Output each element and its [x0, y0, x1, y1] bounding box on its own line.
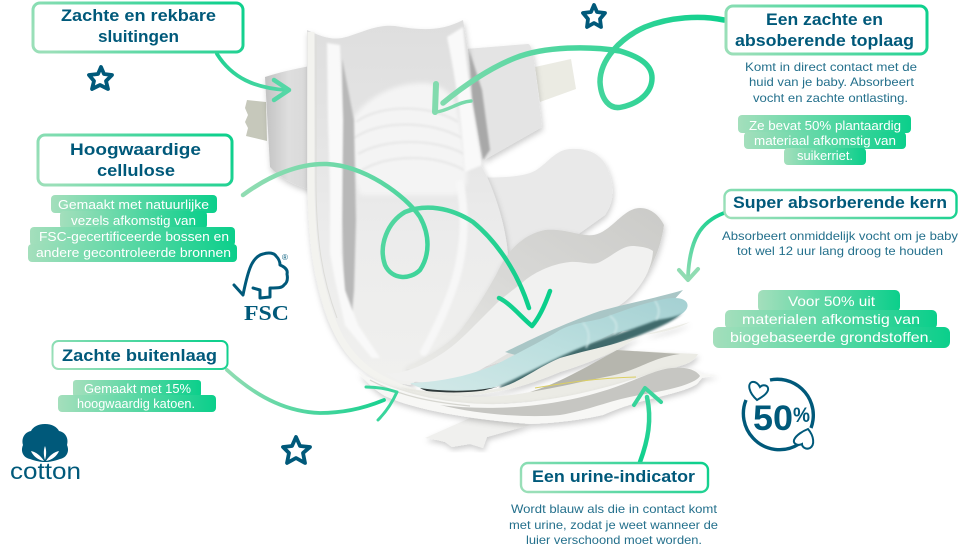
- absorbent top pad: [350, 83, 467, 195]
- arrow: toplaag: [435, 17, 724, 112]
- heading: Een urine-indicator: [532, 468, 696, 486]
- callout: urine-indicator: [509, 463, 718, 547]
- highlight pills: Ze bevat 50% plantaardig: [749, 119, 901, 133]
- heading: sluitingen: [98, 28, 179, 46]
- back thin sheet: [505, 290, 683, 362]
- right tape: [535, 59, 576, 102]
- wave pad outer: [405, 208, 664, 380]
- outer rim: [311, 32, 415, 392]
- icon: star bottom: [283, 437, 310, 463]
- icon: star top left: [89, 67, 112, 89]
- callout: zachte buitenlaag: [52, 341, 228, 412]
- description: tot wel 12 uur lang droog te houden: [737, 244, 943, 258]
- description pills: FSC-gecertificeerde bossen en: [39, 230, 229, 244]
- icon: FSC logo: FSC: [244, 301, 289, 325]
- callout: hoogwaardige cellulose: [28, 135, 237, 262]
- description pills: andere gecontroleerde bronnen: [36, 246, 231, 260]
- arrow: kern: [679, 213, 724, 280]
- heading box: [726, 6, 927, 54]
- right cuff: [447, 27, 482, 172]
- description pills: hoogwaardig katoen.: [77, 397, 195, 411]
- description pills: [58, 380, 216, 412]
- third layer grey inside: [530, 350, 680, 392]
- icon: star top center: [583, 5, 605, 27]
- description: Wordt blauw als die in contact komt: [511, 502, 718, 516]
- heading: Een zachte en: [766, 11, 883, 29]
- icon: 50% badge: %: [793, 404, 810, 427]
- heading: Zachte en rekbare: [61, 7, 216, 25]
- fourth layer: [358, 367, 718, 424]
- back layer: [460, 149, 613, 290]
- description: Absorbeert onmiddelijk vocht om je baby: [722, 229, 958, 243]
- right wing: [465, 44, 542, 160]
- heading: Super absorberende kern: [733, 194, 947, 212]
- description: Komt in direct contact met de: [745, 60, 917, 74]
- callout: zachte en rekbare sluitingen: [33, 3, 243, 52]
- heading: [70, 141, 201, 180]
- description pills: vezels afkomstig van: [71, 214, 196, 228]
- heading box: [52, 341, 228, 369]
- arrow: cellulose: [243, 164, 550, 326]
- fourth layer grey inside: [440, 368, 700, 416]
- description pills: Gemaakt met natuurlijke: [58, 198, 209, 212]
- heading box: [521, 463, 708, 492]
- third layer cream: [385, 350, 698, 404]
- blue absorbent core: [410, 298, 688, 394]
- arrow: sluitingen: [217, 54, 289, 100]
- icon: FSC logo: ®: [282, 253, 288, 262]
- inner lower cuff: [424, 184, 464, 352]
- highlight pills: [738, 115, 911, 165]
- description pills: [28, 195, 237, 262]
- description: [509, 502, 718, 547]
- left cuff: [327, 43, 380, 358]
- main body sheet: [307, 20, 509, 385]
- bottom tab: [425, 418, 530, 448]
- description: luier verschoond moet worden.: [526, 533, 702, 547]
- description: huid van je baby. Absorbeert: [749, 75, 915, 89]
- left tape: [245, 100, 267, 141]
- highlight pills: suikerriet.: [797, 149, 853, 163]
- lower rim line: [370, 380, 470, 406]
- left cuff shadow: [342, 58, 356, 312]
- dark core underside: [500, 312, 684, 388]
- description: [745, 60, 917, 105]
- heading box: [33, 3, 243, 52]
- heading: absoberende toplaag: [735, 32, 914, 50]
- diaper illustration: [245, 20, 718, 448]
- heading box: [724, 190, 956, 218]
- heading: Hoogwaardige: [70, 141, 201, 159]
- left wing: [265, 66, 312, 190]
- heading box: [38, 135, 232, 185]
- highlight: biobased materials: [713, 290, 950, 348]
- arrow: urine-indicator: [634, 388, 661, 462]
- description: met urine, zodat je weet wanneer de: [509, 518, 718, 532]
- highlight pills: materiaal afkomstig van: [754, 134, 896, 148]
- icon: FSC logo: [234, 253, 289, 325]
- right cuff shadow: [469, 50, 490, 160]
- highlight: biobased materials: Voor 50% uit: [788, 293, 875, 309]
- icon: 50% badge: 50: [753, 399, 793, 438]
- heading: [735, 11, 914, 50]
- wave pad white: [385, 246, 653, 382]
- icon: cotton logo: cotton: [10, 458, 81, 484]
- highlight: biobased materials: materialen afkomstig van: [742, 311, 920, 327]
- arrow: buitenlaag: [227, 370, 397, 420]
- heading: Zachte buitenlaag: [62, 347, 217, 365]
- description: [722, 229, 958, 258]
- yellow indicator line: [535, 377, 636, 388]
- heading: cellulose: [97, 162, 175, 180]
- icon: cotton logo: [10, 424, 81, 484]
- callout: super absorberende kern: [722, 190, 958, 258]
- description: vocht en zachte ontlasting.: [753, 91, 908, 105]
- icon: 50% badge: [743, 379, 813, 450]
- callout: zachte en absorberende toplaag: [726, 6, 927, 165]
- description pills: Gemaakt met 15%: [84, 382, 191, 396]
- white sheet under core: [400, 322, 690, 396]
- heading: [61, 7, 216, 46]
- highlight: biobased materials: biogebaseerde grondstoffen.: [730, 329, 933, 345]
